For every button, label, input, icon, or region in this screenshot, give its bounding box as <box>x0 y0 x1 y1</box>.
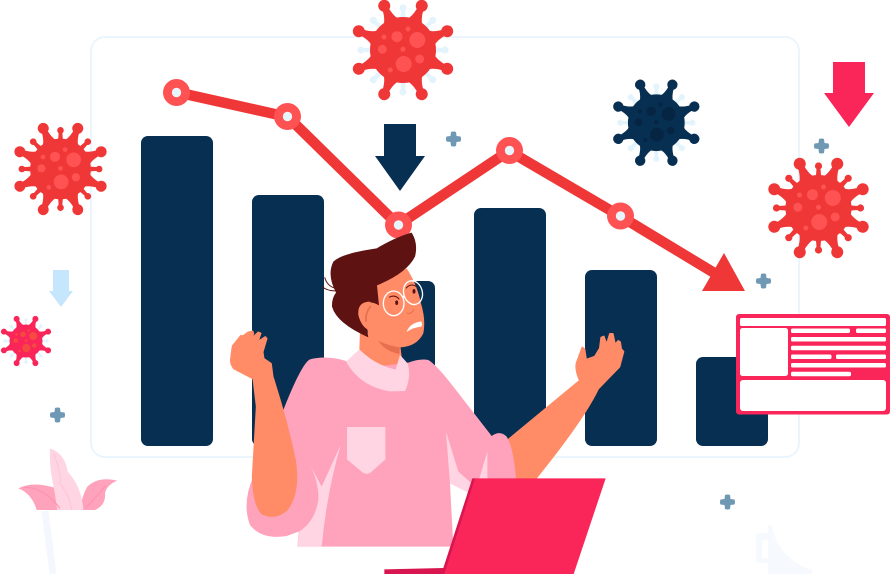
declining trend line with arrow <box>163 79 745 291</box>
nose <box>407 309 414 313</box>
virus: dark navy <box>610 76 703 169</box>
info card <box>736 314 890 414</box>
virus: small pink <box>0 314 53 368</box>
plant <box>18 448 117 510</box>
eyes <box>395 289 415 305</box>
hair <box>331 233 416 337</box>
right arm <box>507 379 600 479</box>
collar <box>346 349 409 391</box>
ear <box>358 302 376 331</box>
plus markers <box>50 132 829 510</box>
virus: left red <box>11 119 110 219</box>
shirt <box>247 358 516 547</box>
glasses <box>383 279 425 316</box>
laptop <box>384 478 477 574</box>
virus: top centre <box>349 0 457 104</box>
bar chart <box>141 136 768 446</box>
megaphone faint <box>756 525 812 574</box>
neck <box>359 330 402 373</box>
hair strands <box>322 277 337 291</box>
arrow: light blue down <box>49 270 73 307</box>
face <box>363 268 424 347</box>
virus: right red <box>764 154 873 262</box>
chart panel frame <box>91 37 799 457</box>
left arm <box>231 331 296 516</box>
pocket <box>347 427 385 474</box>
mouth <box>407 321 422 332</box>
plant pot outline <box>45 511 53 574</box>
neck shadow <box>378 339 400 354</box>
right hand <box>576 334 623 388</box>
arrow: navy down <box>375 124 425 191</box>
shirt light folds <box>297 432 487 547</box>
person <box>231 233 623 574</box>
arrow: pink down <box>824 62 874 127</box>
brows <box>389 285 417 299</box>
